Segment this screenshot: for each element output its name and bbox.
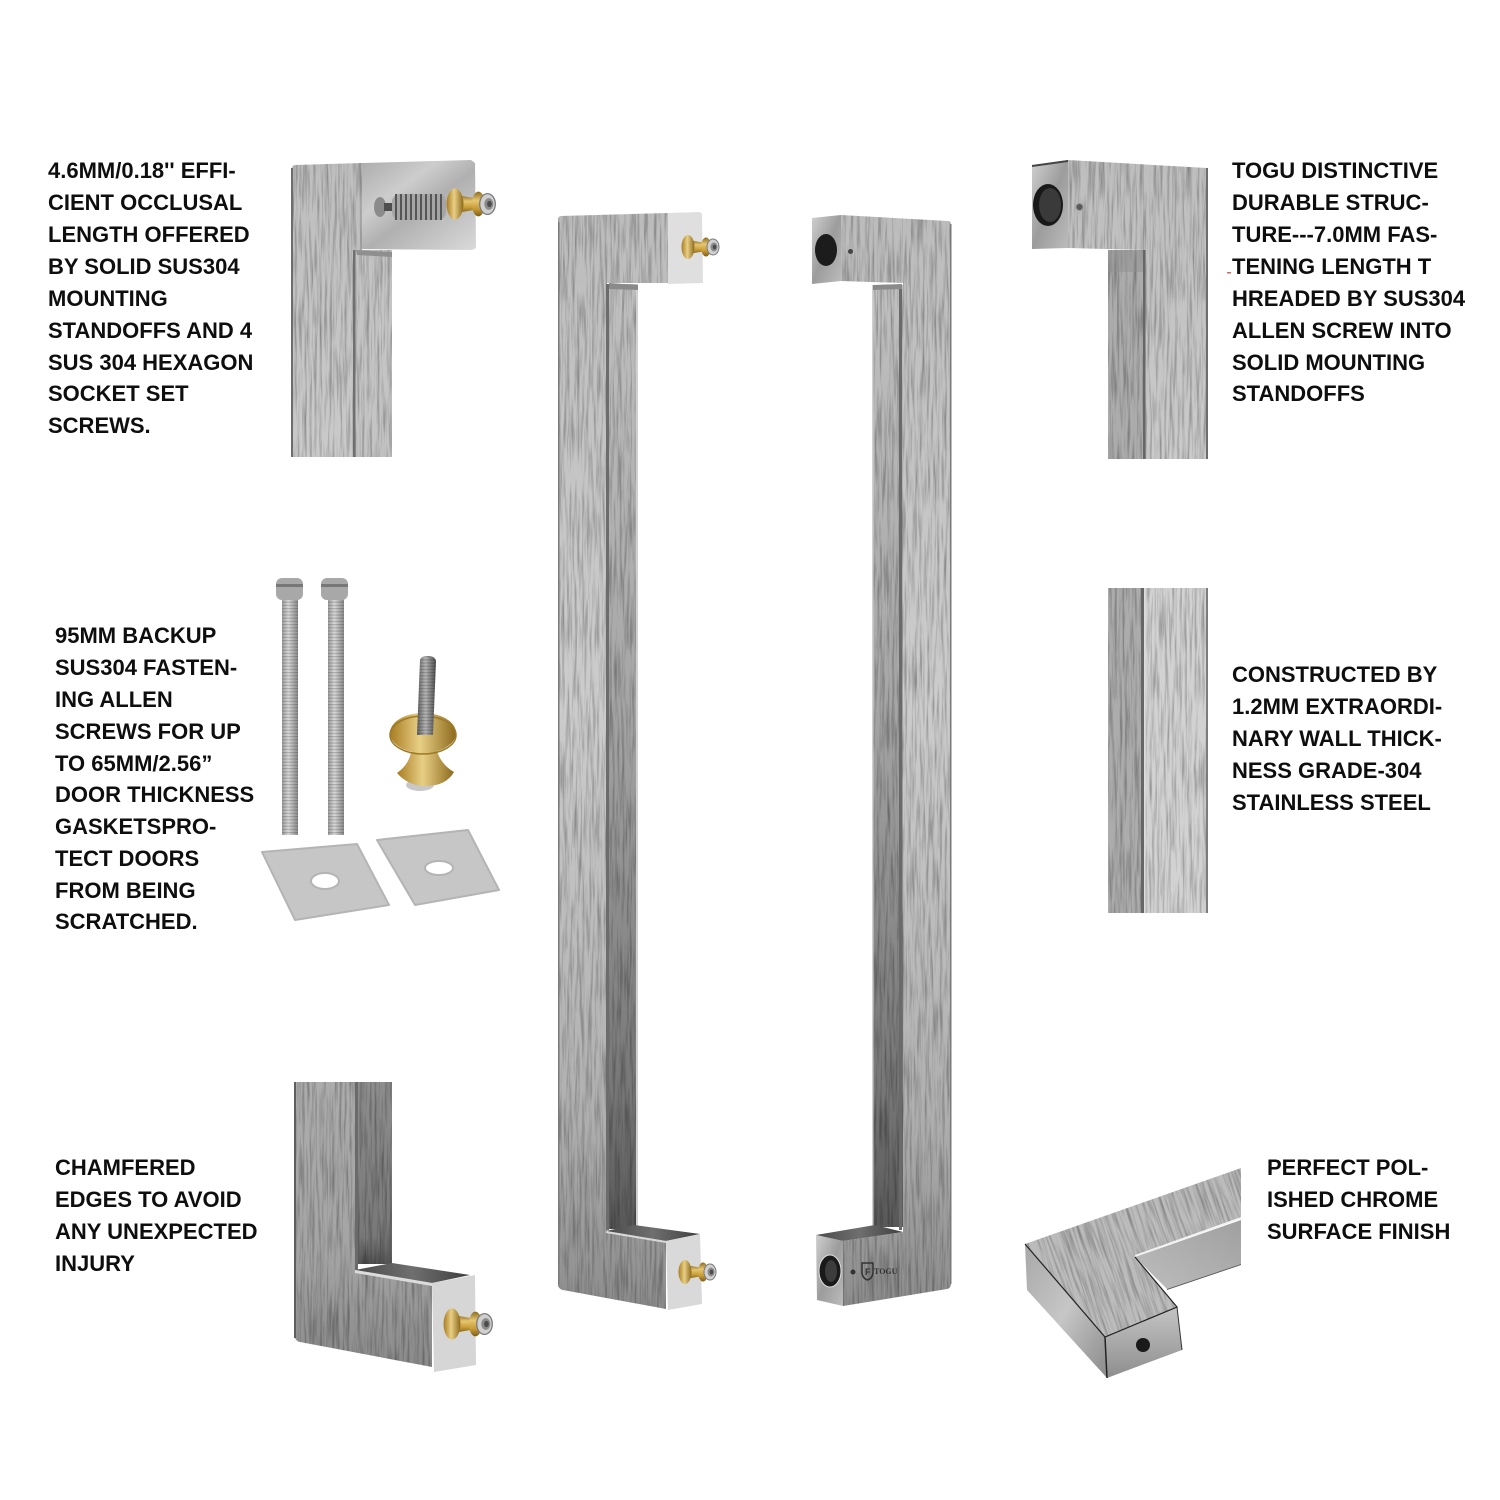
- bottom end cap: [816, 1235, 843, 1306]
- text: chamfered edges: ANY UNEXPECTED: [55, 1219, 258, 1244]
- text: occlusal length: STANDOFFS AND 4: [48, 318, 253, 343]
- text: backup allen screws: SCREWS FOR UP: [55, 719, 241, 744]
- text: occlusal length: SUS 304 HEXAGON: [48, 350, 253, 375]
- text: wall fastening structure: TURE---7.0MM FAS-: [1232, 222, 1437, 247]
- icon: top socket: [815, 234, 837, 266]
- text: wall fastening structure: TOGU DISTINCTIVE: [1232, 158, 1438, 183]
- logo: TOGU: TOGU: [874, 1267, 898, 1276]
- text: occlusal length: 4.6MM/0.18'' EFFI-: [48, 158, 236, 183]
- icon: brass standoff: [447, 188, 495, 220]
- text: backup allen screws: [55, 623, 254, 934]
- text: occlusal length: LENGTH OFFERED: [48, 222, 250, 247]
- text: chamfered edges: EDGES TO AVOID: [55, 1187, 242, 1212]
- icon: top standoff: [682, 235, 719, 259]
- text: backup allen screws: TECT DOORS: [55, 846, 199, 871]
- text: backup allen screws: SCRATCHED.: [55, 909, 198, 934]
- detail photo: angled chrome end: [1024, 1168, 1241, 1378]
- icon: allen screw 1: [276, 578, 303, 835]
- hardware kit: screws, standoff and gaskets: [262, 578, 499, 920]
- icon: allen screw 2: [321, 578, 348, 835]
- text: occlusal length: BY SOLID SUS304: [48, 254, 240, 279]
- text: occlusal length: SOCKET SET: [48, 381, 189, 406]
- text: wall thickness: NARY WALL THICK-: [1232, 726, 1442, 751]
- text: occlusal length: CIENT OCCLUSAL: [48, 190, 242, 215]
- white end plate bottom: [666, 1234, 702, 1310]
- icon: socket hole: [1033, 184, 1063, 226]
- text: occlusal length: MOUNTING: [48, 286, 168, 311]
- text: polished surface: SURFACE FINISH: [1267, 1219, 1450, 1244]
- text: polished surface: [1267, 1155, 1450, 1244]
- top end cap: [812, 215, 841, 284]
- icon: bottom set screw: [850, 1270, 856, 1274]
- detail photo: top of handle with exposed standoff: [291, 160, 495, 457]
- icon: screw hole: [1136, 1338, 1150, 1352]
- text: wall fastening structure: TENING LENGTH T: [1232, 254, 1432, 279]
- icon: gasket 2: [377, 830, 499, 905]
- text: wall fastening structure: SOLID MOUNTING: [1232, 350, 1425, 375]
- detail photo: straight bar section: [1108, 588, 1208, 913]
- center handle: right view: [812, 215, 952, 1306]
- main front face: [558, 213, 668, 1309]
- text: chamfered edges: [55, 1155, 258, 1276]
- text: wall thickness: STAINLESS STEEL: [1232, 790, 1431, 815]
- text: polished surface: PERFECT POL-: [1267, 1155, 1428, 1180]
- text: wall thickness: 1.2MM EXTRAORDI-: [1232, 694, 1442, 719]
- text: wall fastening structure: [1227, 158, 1466, 406]
- icon: small set screw: [1076, 204, 1083, 210]
- icon: threaded spring: [374, 194, 446, 220]
- text: wall fastening structure: ALLEN SCREW INTO: [1232, 318, 1452, 343]
- center handle: left view: [558, 212, 719, 1310]
- text: backup allen screws: GASKETSPRO-: [55, 814, 216, 839]
- inner bar: [873, 285, 903, 1227]
- block top surface: [816, 1225, 903, 1241]
- main front face: [841, 215, 951, 1306]
- icon: top set screw: [848, 249, 853, 254]
- text: wall thickness: NESS GRADE-304: [1232, 758, 1422, 783]
- text: backup allen screws: FROM BEING: [55, 878, 196, 903]
- icon: gasket 1: [262, 844, 389, 920]
- text: wall thickness: CONSTRUCTED BY: [1232, 662, 1438, 687]
- text: backup allen screws: SUS304 FASTEN-: [55, 655, 237, 680]
- text: backup allen screws: 95MM BACKUP: [55, 623, 216, 648]
- text: backup allen screws: DOOR THICKNESS: [55, 782, 254, 807]
- logo: TOGU: [862, 1263, 898, 1280]
- text: occlusal length: [48, 158, 253, 438]
- icon: brass standoff: [444, 1308, 492, 1340]
- text: polished surface: ISHED CHROME: [1267, 1187, 1438, 1212]
- text: wall fastening structure: STANDOFFS: [1232, 381, 1365, 406]
- icon: brass standoff with stud: [390, 656, 456, 791]
- text: occlusal length: SCREWS.: [48, 413, 151, 438]
- text: chamfered edges: INJURY: [55, 1251, 135, 1276]
- white end plate top: [668, 212, 703, 284]
- text: wall fastening structure: HREADED BY SUS304: [1232, 286, 1466, 311]
- icon: bottom standoff: [678, 1260, 716, 1284]
- detail photo: top of handle with end cap: [1032, 160, 1208, 459]
- block top surface: [606, 1225, 700, 1241]
- logo: TOGU: F: [865, 1267, 871, 1277]
- icon: bottom socket: [819, 1255, 841, 1287]
- text: chamfered edges: CHAMFERED: [55, 1155, 196, 1180]
- text: backup allen screws: TO 65MM/2.56”: [55, 751, 212, 776]
- text: wall thickness: [1232, 662, 1442, 815]
- text: wall fastening structure: DURABLE STRUC-: [1232, 190, 1429, 215]
- detail photo: bottom of handle: [294, 1082, 492, 1372]
- text: backup allen screws: ING ALLEN: [55, 687, 173, 712]
- inner bar: [607, 284, 638, 1229]
